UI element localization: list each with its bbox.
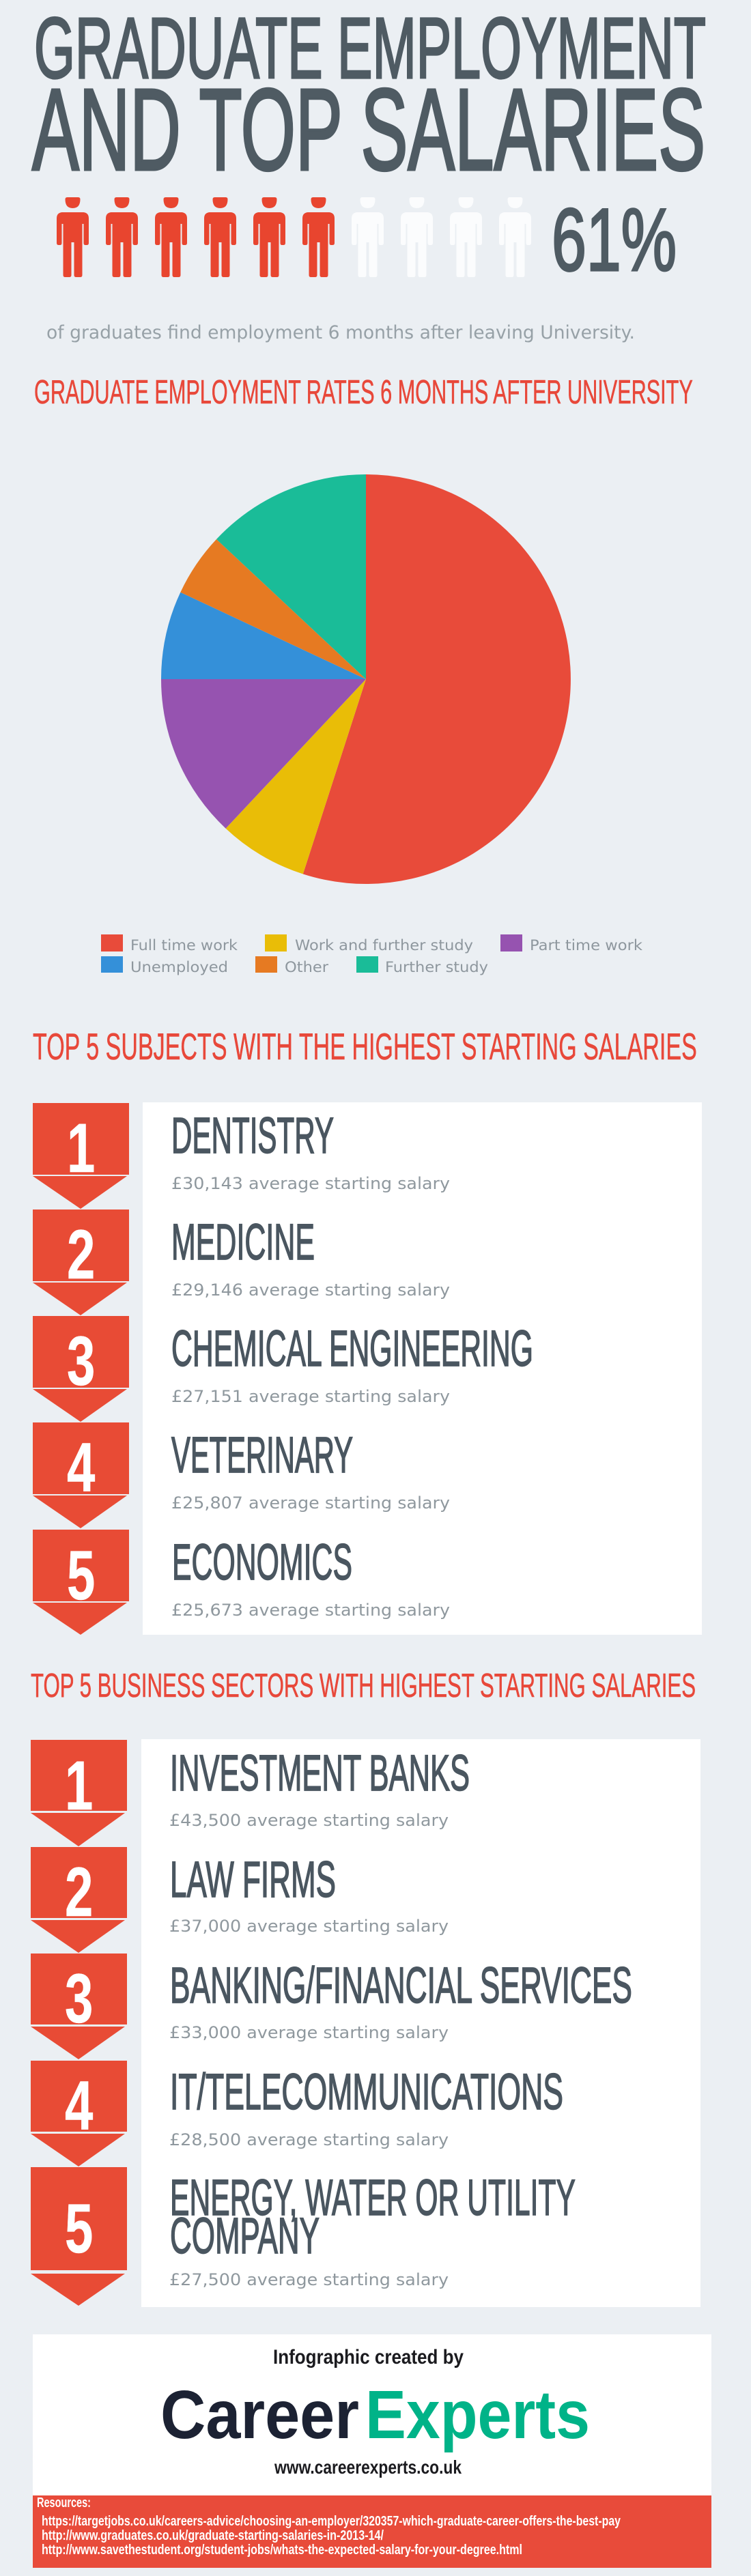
- sector 5: £27,500 average starting salary: [169, 2270, 449, 2289]
- panel: top subjects: 2: [67, 1216, 95, 1293]
- subject 3: [171, 1320, 533, 1406]
- chart legend: Work and further study: [295, 937, 473, 954]
- panel: top business sectors: [31, 1739, 700, 2307]
- logo: Career Experts: Career: [160, 2377, 359, 2453]
- subject 5: [171, 1534, 450, 1620]
- panel: top subjects: 5: [67, 1536, 95, 1614]
- panel: top subjects: 4: [67, 1429, 96, 1506]
- resources label: Resources:: [37, 2495, 91, 2510]
- rank badge 5: [33, 1530, 129, 1635]
- sector 2: £37,000 average starting salary: [169, 1917, 449, 1936]
- sector 4: £28,500 average starting salary: [169, 2130, 449, 2149]
- sector 2: [169, 1851, 449, 1936]
- title: [32, 0, 706, 195]
- icon row: 6 of 10 people highlighted: [57, 197, 531, 277]
- panel: top subjects: 3: [67, 1322, 95, 1400]
- subject 5: £25,673 average starting salary: [171, 1601, 450, 1620]
- subject 2: [171, 1214, 450, 1300]
- rank badge 3: [33, 1316, 129, 1422]
- sector 1: [169, 1745, 470, 1830]
- rank badge 2: [33, 1210, 129, 1315]
- panel: top business sectors: 5: [65, 2190, 93, 2267]
- panel: credits: [33, 2334, 711, 2495]
- resource links: https://targetjobs.co.uk/careers-advice/choosing-an-employer/320357-which-graduate-career-offers-the-best-pay: [42, 2514, 621, 2529]
- rank badge 4: [33, 1422, 129, 1528]
- resource links: http://www.savethestudent.org/student-jobs/whats-the-expected-salary-for-your-degree.html: [42, 2543, 522, 2558]
- subject 1: £30,143 average starting salary: [171, 1174, 450, 1193]
- credit line: Infographic created by: [273, 2346, 464, 2369]
- rank badge 3: [31, 1954, 127, 2059]
- sector 5: [169, 2169, 576, 2289]
- subject 3: £27,151 average starting salary: [171, 1387, 450, 1406]
- sector 4: [169, 2063, 563, 2149]
- chart legend: Full time work: [130, 937, 238, 954]
- text block: employment caption: of graduates find employment 6 months after leaving University.: [46, 322, 635, 343]
- panel: top business sectors: 2: [65, 1853, 93, 1931]
- subject 1: [171, 1107, 450, 1193]
- sector 3: £33,000 average starting salary: [169, 2023, 449, 2042]
- panel: resources: [33, 2495, 711, 2568]
- rank badge 5: [31, 2167, 127, 2306]
- chart legend: [101, 934, 643, 975]
- rank badge 4: [31, 2061, 127, 2166]
- panel: top business sectors: 4: [65, 2067, 94, 2145]
- logo: Career Experts: [160, 2377, 590, 2453]
- chart legend: Further study: [385, 959, 488, 975]
- sector 1: £43,500 average starting salary: [169, 1811, 449, 1830]
- subject 4: [171, 1427, 450, 1513]
- rank badge 1: [33, 1103, 129, 1209]
- chart legend: Other: [285, 959, 328, 975]
- panel: top subjects: 1: [67, 1109, 95, 1187]
- sector 3: [169, 1957, 632, 2042]
- rank badge 1: [31, 1740, 127, 1846]
- chart legend: Part time work: [530, 937, 643, 954]
- panel: top business sectors: 1: [65, 1747, 93, 1824]
- subject 2: £29,146 average starting salary: [171, 1280, 450, 1300]
- panel: top subjects: [33, 1102, 702, 1635]
- website address: www.careerexperts.co.uk: [274, 2457, 462, 2478]
- panel: top business sectors: 3: [65, 1960, 93, 2037]
- chart legend: Unemployed: [130, 959, 228, 975]
- rank badge 2: [31, 1847, 127, 1953]
- logo: Career Experts: Experts: [365, 2377, 590, 2453]
- resource links: http://www.graduates.co.uk/graduate-starting-salaries-in-2013-14/: [42, 2528, 384, 2543]
- pie chart: employment rates: [161, 474, 571, 884]
- resource links: [42, 2514, 621, 2558]
- subject 4: £25,807 average starting salary: [171, 1493, 450, 1513]
